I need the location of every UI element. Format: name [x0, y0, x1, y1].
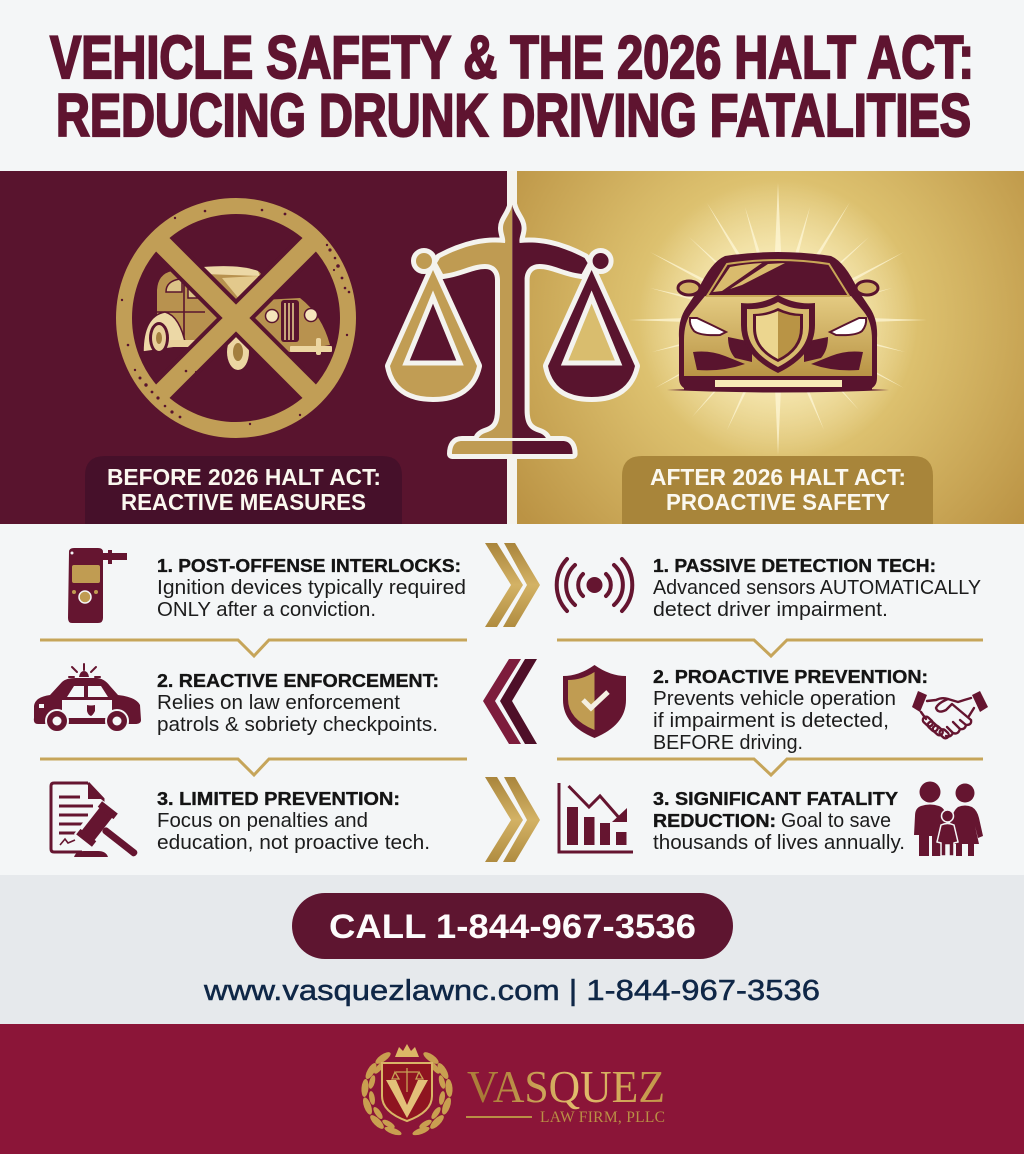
divider: left row 1-2 [40, 640, 467, 656]
sunburst rays [629, 180, 927, 460]
label: after: AFTER 2026 HALT ACT: [650, 464, 906, 490]
logo wordmark: VASQUEZ [467, 1062, 665, 1112]
contact band [0, 875, 1024, 1024]
icon: declining bar chart [559, 783, 633, 852]
icon: police car [34, 664, 141, 732]
call button: CALL 1-844-967-3536 [329, 908, 696, 946]
row 3 left: limited prevention [51, 783, 430, 872]
divider between panels [507, 171, 517, 524]
text block: Prevents vehicle operation [653, 687, 896, 710]
vintage car [143, 266, 332, 374]
text block: 3. SIGNIFICANT FATALITY [653, 788, 899, 809]
icon: modern car with shield [667, 252, 889, 392]
row 1 right: passive detection [557, 555, 981, 621]
prohibition ring and cross [121, 206, 350, 430]
footer band [0, 1024, 1024, 1154]
panel: before [0, 171, 507, 524]
text block [157, 555, 466, 621]
row 2 right: proactive prevention [563, 665, 988, 754]
text block: Advanced sensors AUTOMATICALLY [653, 576, 981, 599]
text block: thousands of lives annually. [653, 831, 905, 854]
icon: shield with check [563, 665, 626, 738]
logo crest [361, 1044, 453, 1137]
text block: Relies on law enforcement [157, 691, 400, 714]
logo wordmark: LAW FIRM, PLLC [540, 1109, 665, 1126]
divider: right row 1-2 [557, 640, 983, 656]
right half of scale [512, 205, 635, 454]
text block [653, 788, 905, 854]
chevrons: gold forward row 3 [485, 777, 540, 862]
text block: ONLY after a conviction. [157, 598, 376, 621]
icon: family [914, 782, 983, 856]
divider: right row 2-3 [557, 759, 983, 775]
text block: Focus on penalties and [157, 809, 368, 832]
text block: REDUCTION: [653, 810, 776, 831]
text block: patrols & sobriety checkpoints. [157, 713, 438, 736]
text block [157, 670, 439, 736]
title [50, 24, 974, 149]
label: after: PROACTIVE SAFETY [666, 489, 890, 515]
chevrons: gold forward row 1 [485, 543, 540, 627]
label: after [622, 456, 933, 524]
call button [292, 893, 733, 959]
text block: Ignition devices typically required [157, 576, 466, 599]
text block: BEFORE driving. [653, 731, 803, 754]
shield emblem [741, 295, 815, 373]
text block: Goal to save [781, 809, 891, 832]
text block: 1. POST-OFFENSE INTERLOCKS: [157, 555, 461, 576]
text block: detect driver impairment. [653, 598, 888, 621]
panel: after [517, 171, 1024, 524]
icon: crossed-out vintage car [121, 206, 350, 430]
website and phone: www.vasquezlawnc.com | 1-844-967-3536 [203, 975, 820, 1007]
text block [157, 788, 430, 854]
text block: 2. PROACTIVE PREVENTION: [653, 666, 928, 687]
icon: sensor signal [557, 559, 632, 611]
icon: handshake [912, 691, 988, 740]
row 1 left: post-offense interlocks [68, 548, 466, 623]
divider: left row 2-3 [40, 759, 467, 775]
row 3 right: significant fatality reduction [559, 782, 983, 856]
icon: scales of justice [385, 204, 640, 459]
left half of scale [390, 205, 512, 454]
text block: 1. PASSIVE DETECTION TECH: [653, 555, 936, 576]
text block: if impairment is detected, [653, 709, 889, 732]
text block [653, 666, 928, 754]
icon: document and gavel [51, 783, 150, 872]
label: before [85, 456, 402, 524]
icon: breathalyzer [68, 548, 127, 623]
chevrons: maroon backward row 2 [483, 659, 537, 744]
label: before: REACTIVE MEASURES [121, 489, 366, 515]
text block: 2. REACTIVE ENFORCEMENT: [157, 670, 439, 691]
row 2 left: reactive enforcement [34, 664, 439, 736]
label: before: BEFORE 2026 HALT ACT: [107, 464, 381, 490]
text block: education, not proactive tech. [157, 831, 430, 854]
text block: 3. LIMITED PREVENTION: [157, 788, 400, 809]
text block [653, 555, 981, 621]
logo: Vasquez Law Firm [361, 1044, 665, 1137]
